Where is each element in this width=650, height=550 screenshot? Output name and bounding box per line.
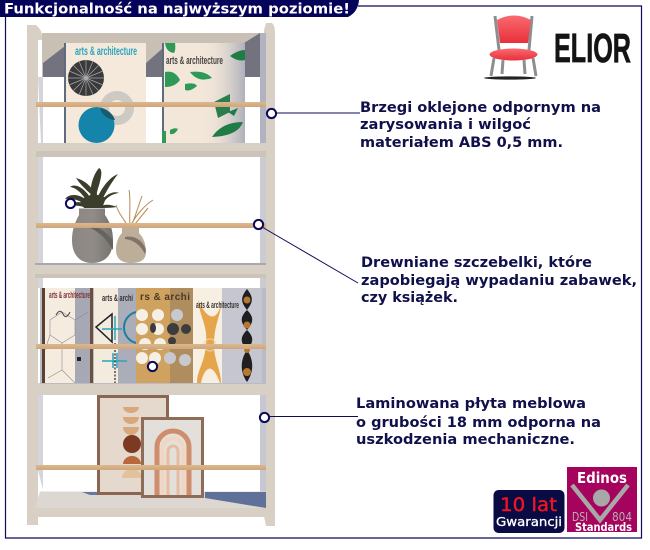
callout: wooden rails: Drewniane szczebelki, które xyxy=(361,255,592,271)
book: arts and architecture, leaves cover: arts & architecture xyxy=(166,55,223,67)
callout: wooden rails: czy książek. xyxy=(361,290,458,306)
badge: 10 year warranty xyxy=(494,490,564,533)
callout: ABS edging: materiałem ABS 0,5 mm. xyxy=(360,135,563,151)
uprights xyxy=(27,23,275,526)
row of four books: arts & architecture xyxy=(49,290,90,300)
callout: wooden rails: zapobiegają wypadaniu zabawek, xyxy=(361,273,637,289)
callout: laminated board: uszkodzenia mechaniczne. xyxy=(356,432,575,448)
plant in large vase xyxy=(65,168,119,263)
callout: laminated board: Laminowana płyta meblowa xyxy=(356,396,586,412)
badge: 10 year warranty: Gwarancji xyxy=(496,515,562,529)
callout: ABS edging xyxy=(267,100,601,151)
book: arts and architecture, wheel cover: arts & architecture xyxy=(75,44,137,58)
row of four books: rs & archi xyxy=(140,292,190,303)
framed rainbow poster xyxy=(142,418,202,496)
icon: red chair xyxy=(484,16,538,80)
wooden rails xyxy=(36,102,266,470)
badge: Edinos standards: DSI xyxy=(572,510,588,524)
framed moon phases poster xyxy=(98,396,168,494)
row of four books: arts & archi xyxy=(102,293,133,303)
dried grass in small vase xyxy=(116,190,153,263)
callout: laminated board xyxy=(260,396,601,448)
callout: wooden rails xyxy=(254,220,637,306)
shelf boards xyxy=(35,143,266,517)
title banner: Funkcjonalność na najwyższym poziomie! xyxy=(4,2,350,18)
row of four books: arts & architecture xyxy=(196,300,239,310)
logo: Elior xyxy=(484,16,631,80)
shelf back panel xyxy=(42,33,260,77)
badge: Edinos standards: Standards xyxy=(575,520,632,534)
badge: Edinos standards: Edinos xyxy=(577,469,627,487)
callout: laminated board: o grubości 18 mm odporna na xyxy=(356,415,601,431)
callout: ABS edging: Brzegi oklejone odpornym na xyxy=(360,100,601,116)
callout: ABS edging: zarysowania i wilgoć xyxy=(360,117,531,133)
book: arts and architecture, leaves cover xyxy=(162,43,245,143)
marker: plant xyxy=(66,199,75,208)
badge: Edinos standards: 804 xyxy=(612,510,632,524)
bookshelf illustration xyxy=(27,23,275,526)
row of four books xyxy=(40,288,266,384)
marker: books xyxy=(148,362,157,371)
book: arts and architecture, wheel cover xyxy=(64,43,146,143)
badge: Edinos standards xyxy=(567,467,637,534)
badge: 10 year warranty: 10 lat xyxy=(500,494,557,516)
